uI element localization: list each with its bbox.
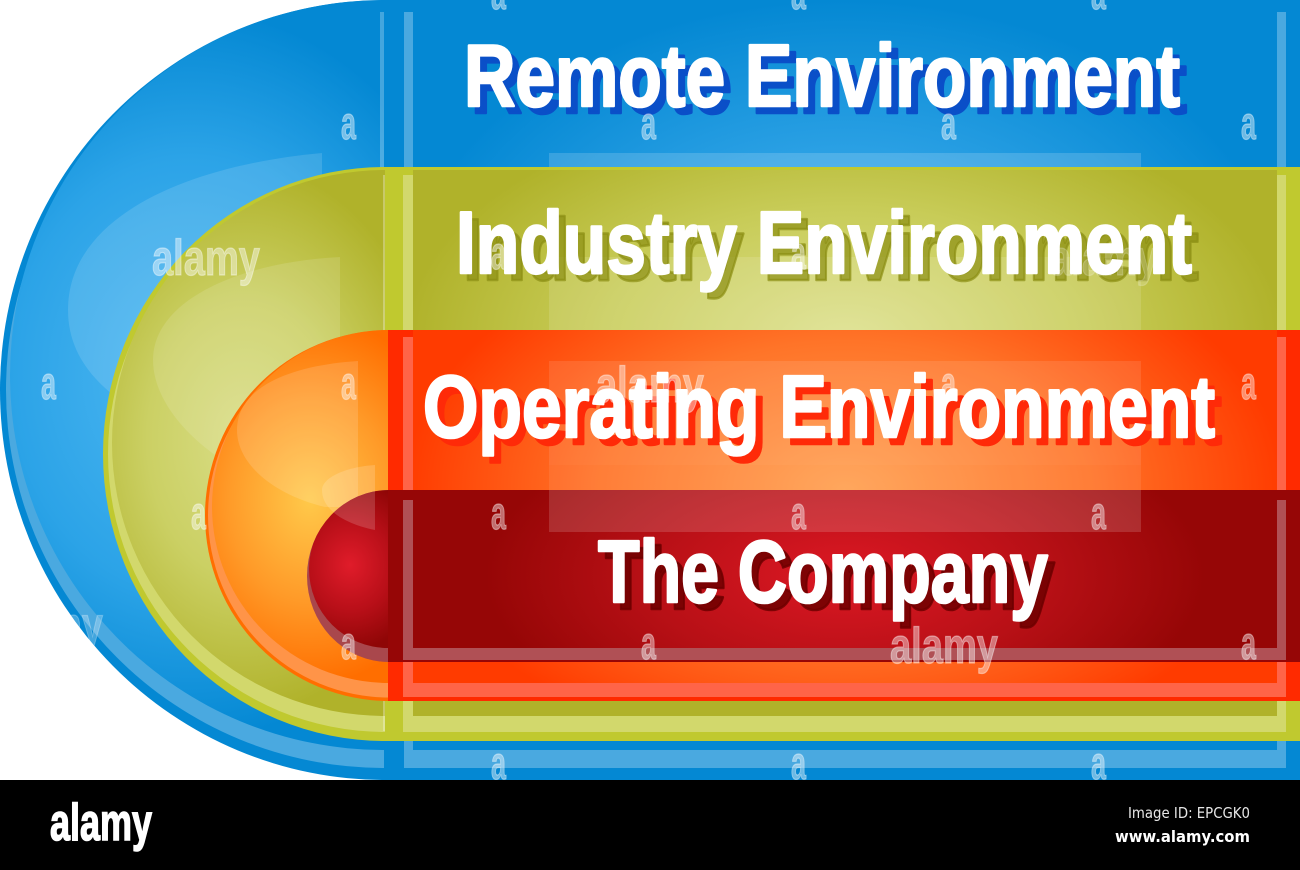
stock watermark: a — [1091, 487, 1106, 539]
stock watermark: a — [1241, 617, 1256, 669]
stock watermark: a — [491, 737, 506, 789]
stock watermark: a — [1241, 357, 1256, 409]
stock watermark: a — [941, 357, 956, 409]
stock watermark: alamy — [152, 230, 260, 286]
stock watermark: a — [641, 97, 656, 149]
image id caption: Image ID: EPCGK0 — [1128, 804, 1250, 822]
stock watermark: a — [1241, 97, 1256, 149]
panel: operating environment bar — [388, 330, 1300, 701]
stock watermark: alamy — [890, 618, 998, 674]
panel: operating environment capsule end — [205, 330, 388, 701]
stock watermark: a — [491, 227, 506, 279]
stock watermark: a — [791, 487, 806, 539]
panel: industry environment capsule end — [103, 167, 385, 741]
stock watermark: a — [791, 737, 806, 789]
stock watermark: a — [41, 357, 56, 409]
stock watermark: a — [941, 97, 956, 149]
stock watermark: alamy — [596, 357, 704, 413]
stock watermark: a — [641, 617, 656, 669]
panel: industry environment bar — [385, 167, 1300, 741]
stock watermark: a — [1091, 737, 1106, 789]
footer logo: alamy — [50, 794, 152, 852]
panel: remote environment bar — [384, 0, 1300, 780]
panel: the company bar — [388, 490, 1300, 662]
footer bar — [0, 780, 1300, 870]
stock watermark: a — [341, 357, 356, 409]
panel: the company capsule end — [307, 490, 388, 662]
highlight: shared glare band — [322, 465, 1141, 532]
stock watermark: a — [491, 487, 506, 539]
stock watermark: alamy — [1050, 230, 1158, 286]
stock watermark: a — [791, 227, 806, 279]
heading: The Company: The Company — [598, 522, 1048, 621]
stock watermark: a — [341, 617, 356, 669]
stock watermark: a — [341, 97, 356, 149]
heading: The Company: The Company — [605, 529, 1055, 628]
panel: remote environment capsule end — [0, 0, 384, 780]
website caption: www.alamy.com — [1115, 827, 1250, 846]
stock watermark: a — [191, 487, 206, 539]
